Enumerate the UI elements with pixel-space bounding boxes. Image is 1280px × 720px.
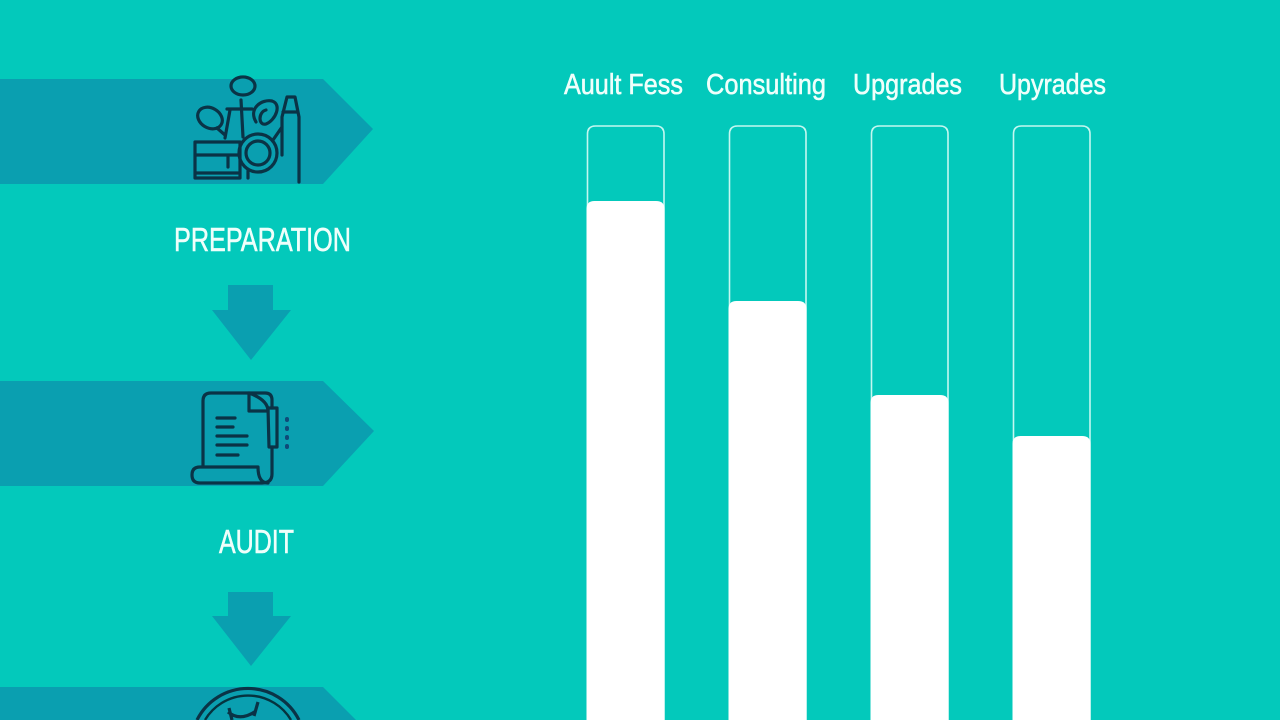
- icon: preparation tools: [194, 77, 299, 182]
- step banner: partial: [0, 687, 356, 720]
- step banner: audit: [0, 381, 374, 486]
- arrow: down 1: [212, 285, 291, 360]
- label: consulting: Consulting: [706, 69, 826, 101]
- label: audit: AUDIT: [219, 523, 294, 560]
- bar: upgrades 1: [853, 69, 962, 720]
- icon: round partial: [197, 688, 299, 720]
- bar: consulting: [706, 69, 826, 720]
- label: upgrades 2: Upyrades: [999, 69, 1106, 101]
- step banner: preparation: [0, 79, 373, 184]
- label: upgrades 1: Upgrades: [853, 69, 962, 101]
- process flow: [0, 77, 374, 720]
- bar chart: [564, 69, 1106, 720]
- arrow: down 2: [212, 592, 291, 666]
- icon: document scroll: [192, 393, 287, 483]
- bar: upgrades 2: [999, 69, 1106, 720]
- bar: audit fees: [564, 69, 683, 720]
- label: preparation: PREPARATION: [174, 221, 351, 258]
- label: audit fees: Auult Fess: [564, 69, 683, 101]
